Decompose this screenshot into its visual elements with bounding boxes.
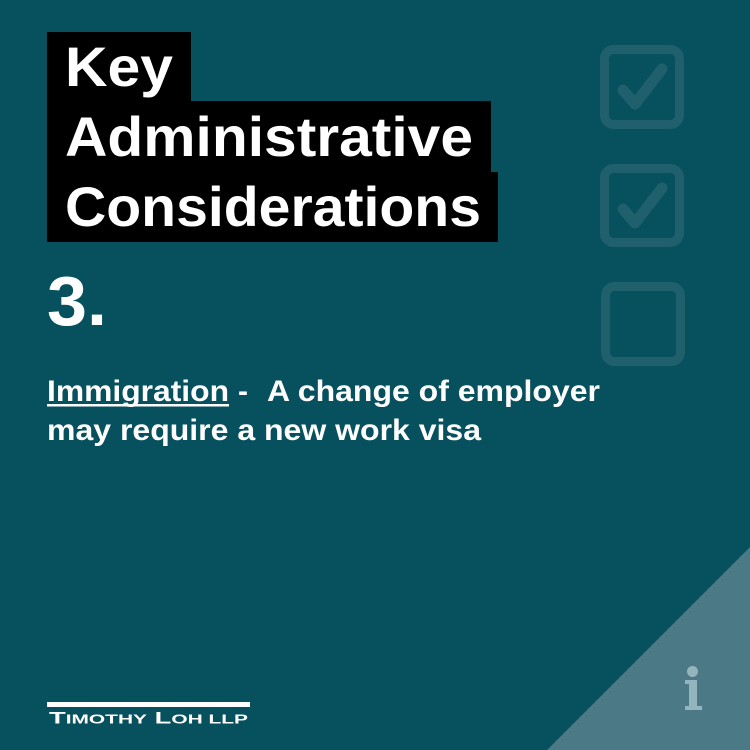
- text block: immigration note: [47, 375, 600, 447]
- info corner triangle: [547, 547, 750, 750]
- heading: title block: [47, 32, 498, 242]
- icon: checked box 1: [604, 50, 680, 124]
- text block: immigration note: A change of employer: [267, 375, 600, 408]
- step number: 3.: [47, 262, 107, 340]
- icon: checked box 2: [604, 168, 680, 242]
- heading: title block: Key: [65, 35, 173, 98]
- text block: immigration note: may require a new work visa: [47, 414, 481, 447]
- logo: Timothy Loh LLP: T IMOTHY L OH LLP: [49, 708, 249, 728]
- text block: immigration note: Immigration: [47, 375, 229, 408]
- heading: title block: Administrative: [65, 105, 473, 168]
- logo: Timothy Loh LLP: [47, 702, 250, 728]
- heading: title block: Considerations: [65, 175, 481, 238]
- text block: immigration note: -: [238, 375, 248, 408]
- icon: empty box: [606, 286, 680, 362]
- icon: info letter i: [685, 666, 702, 710]
